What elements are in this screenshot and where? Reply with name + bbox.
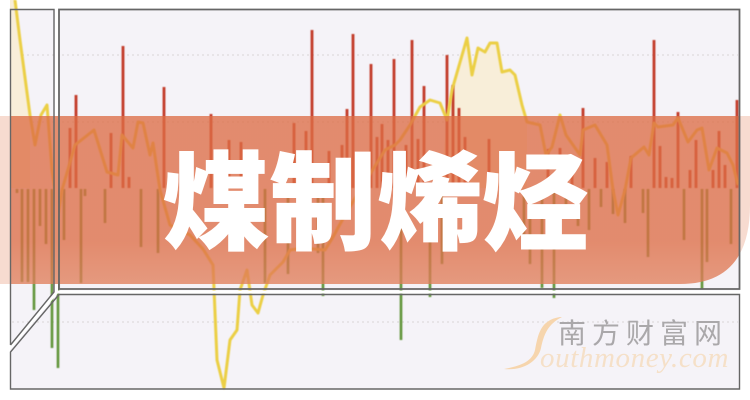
orange title band	[0, 116, 750, 284]
gridlines	[12, 55, 738, 322]
watermark Chinese name: 南方财富网	[558, 318, 728, 349]
chart: red positive bars	[70, 30, 737, 188]
chart: yellow price area	[10, 0, 527, 188]
left overview frame	[10, 10, 54, 345]
title: 煤制烯烃	[163, 146, 588, 264]
lower frame	[10, 294, 740, 389]
watermark logo	[504, 317, 729, 374]
chart: green negative bars	[17, 189, 731, 368]
light band edges outside the chart frame	[0, 116, 750, 284]
watermark domain: outhmoney.com	[540, 342, 729, 374]
main upper frame	[59, 10, 740, 289]
watermark swoosh	[504, 317, 562, 369]
